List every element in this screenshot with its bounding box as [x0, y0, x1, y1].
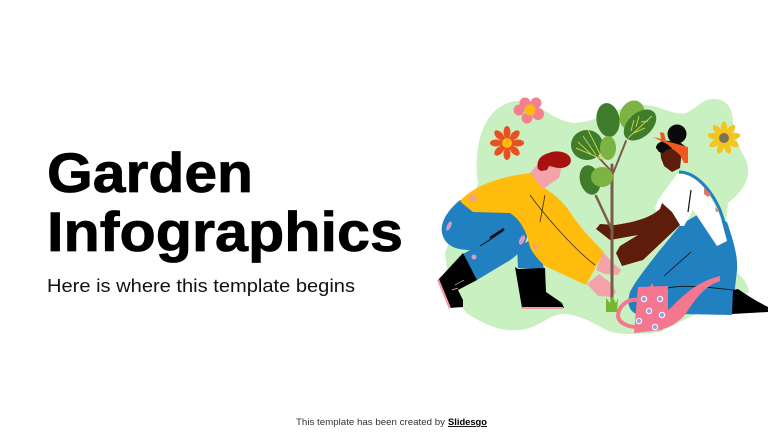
- flower: sunflower: [707, 122, 741, 155]
- body: [634, 286, 668, 333]
- white shirt: [655, 174, 727, 246]
- footer credit: Slidesgo: [448, 417, 488, 427]
- subtitle: Here is where this template begins: [47, 275, 355, 296]
- title: [47, 141, 403, 263]
- boot: right: [515, 267, 564, 308]
- flower: red: [490, 126, 524, 160]
- bandana: [653, 132, 688, 163]
- flower: pink: [514, 98, 544, 124]
- leaves: [594, 102, 622, 138]
- gardener: woman: [596, 124, 768, 315]
- illustration: gardeners planting a tree: [437, 96, 768, 334]
- overall strap: [679, 172, 730, 240]
- title: Infographics: [47, 200, 403, 263]
- hands: [587, 252, 621, 297]
- boot: left: [438, 253, 477, 308]
- title: Garden: [47, 141, 253, 204]
- hair and bun: [668, 124, 686, 144]
- back leg: [517, 240, 544, 269]
- gardener: man: [437, 151, 621, 309]
- face and neck: [530, 164, 562, 189]
- head: [660, 148, 682, 172]
- dots: [636, 296, 665, 330]
- plant: [571, 96, 662, 312]
- hair: [538, 151, 571, 171]
- footer credit: This template has been created by: [296, 417, 446, 427]
- front leg and jeans: [442, 200, 528, 280]
- boot: [732, 289, 768, 314]
- green background blob: [445, 99, 749, 334]
- handle: [618, 300, 638, 327]
- shirt: [460, 173, 604, 285]
- arms: [596, 203, 680, 266]
- overalls: [628, 215, 737, 315]
- spout: [662, 276, 720, 329]
- trunk and branches: [590, 141, 626, 300]
- watering can: [618, 276, 720, 333]
